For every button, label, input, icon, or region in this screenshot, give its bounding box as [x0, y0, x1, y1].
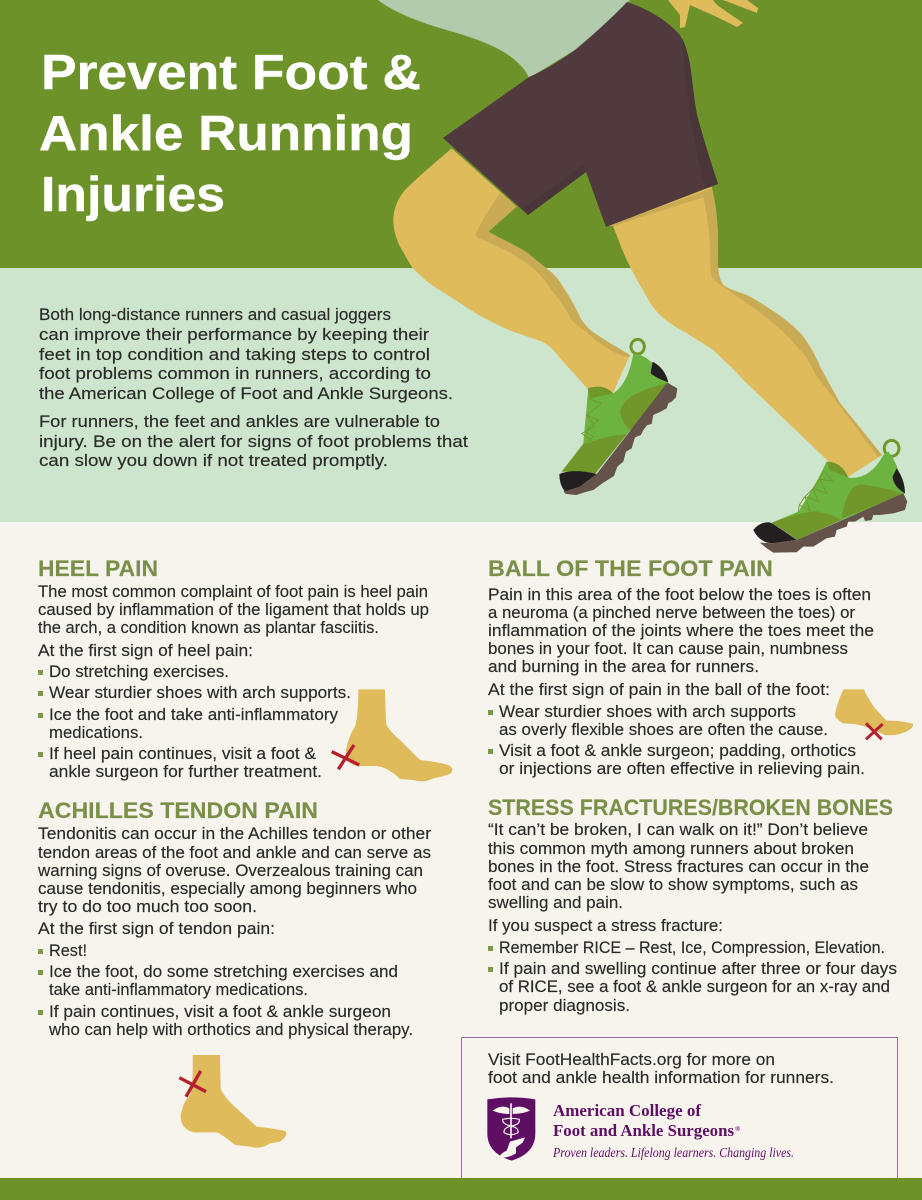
text: stress fracture description: “It can’t be broken, I can walk on it!” Don’t believe: [488, 821, 868, 839]
text: stress fracture description: bones in the foot. Stress fractures can occur in the: [488, 858, 869, 876]
icon: heel foot: [332, 689, 452, 781]
list: heel pain tips: ankle surgeon for further treatment.: [49, 763, 322, 781]
front shoe: [753, 440, 907, 553]
heading: achilles: ACHILLES TENDON PAIN: [38, 798, 318, 823]
organization name: Foot and Ankle Surgeons: [553, 1121, 735, 1140]
text: achilles description: warning signs of overuse. Overzealous training can: [37, 862, 423, 880]
text: heel pain description: [38, 583, 429, 660]
list: achilles tips: Rest!: [49, 942, 87, 960]
text: achilles description: [37, 825, 432, 938]
list: achilles tips: Ice the foot, do some stretching exercises and: [49, 963, 398, 981]
footer bar: [0, 1178, 922, 1200]
list: heel pain tips: Ice the foot and take anti-inflammatory: [49, 706, 339, 724]
list: stress fracture tips: If pain and swelling continue after three or four days: [499, 960, 897, 978]
section: ball of the foot pain: [488, 556, 874, 778]
list: achilles tips: who can help with orthotics and physical therapy.: [48, 1021, 413, 1039]
intro text: injury. Be on the alert for signs of foot problems that: [39, 433, 468, 451]
intro text: feet in top condition and taking steps to control: [39, 346, 430, 364]
panel: intro background: [0, 268, 922, 522]
organization name: Proven leaders. Lifelong learners. Changing lives.: [552, 1146, 794, 1161]
organization name: [552, 1101, 794, 1161]
title: Ankle Running: [39, 107, 413, 161]
list: stress fracture tips: of RICE, see a foot & ankle surgeon for an x-ray and: [499, 978, 890, 996]
callout: visit box: [462, 1038, 898, 1178]
intro text: can slow you down if not treated promptly.: [39, 452, 388, 470]
text: heel pain description: caused by inflammation of the ligament that holds up: [38, 601, 429, 619]
text: heel pain description: the arch, a condition known as plantar fasciitis.: [38, 619, 379, 637]
text: stress fracture description: this common myth among runners about broken: [488, 840, 854, 858]
shoes: [559, 339, 907, 553]
intro text: can improve their performance by keeping their: [39, 326, 430, 344]
text: ball of foot description: and burning in the area for runners.: [488, 658, 759, 676]
title: Prevent Foot &: [41, 46, 421, 100]
icon: logo shield: [487, 1097, 535, 1161]
text: ball of foot description: [488, 586, 874, 699]
section: heel pain: [38, 556, 429, 781]
list: heel pain tips: Do stretching exercises.: [49, 663, 229, 681]
list: ball of foot tips: [488, 703, 865, 778]
callout: visit box: Visit FootHealthFacts.org for more on: [488, 1051, 775, 1069]
heading: heel pain: HEEL PAIN: [38, 556, 158, 581]
front leg: [607, 187, 882, 477]
list: stress fracture tips: Remember RICE – Rest, Ice, Compression, Elevation.: [499, 939, 885, 957]
list: heel pain tips: If heel pain continues, visit a foot &: [49, 745, 316, 763]
list: achilles tips: take anti-inflammatory medications.: [49, 981, 308, 999]
list: heel pain tips: medications.: [49, 724, 143, 742]
hand: [668, 0, 758, 28]
list: stress fracture tips: proper diagnosis.: [499, 997, 630, 1015]
shorts: [443, 2, 718, 227]
text: achilles description: Tendonitis can occur in the Achilles tendon or other: [38, 825, 432, 843]
list: ball of foot tips: as overly flexible shoes are often the cause.: [499, 721, 828, 739]
panel: body background: [0, 522, 922, 1178]
text: achilles description: cause tendonitis, especially among beginners who: [38, 880, 417, 898]
intro text: [39, 306, 468, 470]
icon: achilles foot: [179, 1055, 286, 1148]
rear shoe: [559, 339, 677, 495]
organization name: ®: [735, 1125, 741, 1133]
list: stress fracture tips: [488, 939, 897, 1015]
intro text: For runners, the feet and ankles are vulnerable to: [39, 413, 440, 431]
intro text: foot problems common in runners, according to: [39, 365, 431, 383]
section: achilles tendon pain: [37, 798, 432, 1039]
text: achilles description: try to do too much too soon.: [38, 898, 257, 916]
shirt: [378, 0, 630, 78]
text: ball of foot description: bones in your foot. It can cause pain, numbness: [488, 640, 848, 658]
intro text: Both long-distance runners and casual joggers: [39, 306, 391, 324]
organization name: American College of: [553, 1101, 702, 1120]
text: stress fracture description: foot and can be slow to show symptoms, such as: [488, 876, 858, 894]
list: heel pain tips: Wear sturdier shoes with arch supports.: [49, 684, 351, 702]
list: heel pain tips: [38, 663, 351, 781]
rear leg: [393, 148, 630, 393]
text: ball of foot description: inflammation of the joints where the toes meet the: [488, 622, 874, 640]
title: [39, 46, 421, 222]
text: stress fracture description: swelling and pain.: [488, 894, 623, 912]
list: achilles tips: [38, 942, 413, 1039]
illustration: runner: [378, 0, 907, 553]
icon: ball of foot: [835, 689, 913, 739]
text: ball of foot description: Pain in this area of the foot below the toes is often: [488, 586, 871, 604]
text: heel pain description: At the first sign of heel pain:: [38, 642, 253, 660]
list: ball of foot tips: Visit a foot & ankle surgeon; padding, orthotics: [499, 742, 856, 760]
text: achilles description: tendon areas of the foot and ankle and can serve as: [38, 844, 431, 862]
heading: stress fractures: STRESS FRACTURES/BROKEN BONES: [488, 795, 893, 820]
section: stress fractures: [488, 795, 897, 1015]
text: heel pain description: The most common complaint of foot pain is heel pain: [38, 583, 428, 601]
text: ball of foot description: At the first sign of pain in the ball of the foot:: [488, 681, 830, 699]
heading: ball of foot: BALL OF THE FOOT PAIN: [488, 556, 773, 581]
list: ball of foot tips: or injections are often effective in relieving pain.: [499, 760, 865, 778]
text: achilles description: At the first sign of tendon pain:: [38, 920, 275, 938]
list: ball of foot tips: Wear sturdier shoes with arch supports: [499, 703, 796, 721]
text: stress fracture description: If you suspect a stress fracture:: [488, 917, 723, 935]
panel: header background: [0, 0, 922, 268]
callout: visit box: foot and ankle health information for runners.: [488, 1069, 834, 1087]
intro text: the American College of Foot and Ankle Surgeons.: [39, 385, 453, 403]
list: achilles tips: If pain continues, visit a foot & ankle surgeon: [49, 1003, 391, 1021]
title: Injuries: [41, 168, 225, 222]
text: ball of foot description: a neuroma (a pinched nerve between the toes) or: [488, 604, 856, 622]
text: stress fracture description: [488, 821, 869, 935]
